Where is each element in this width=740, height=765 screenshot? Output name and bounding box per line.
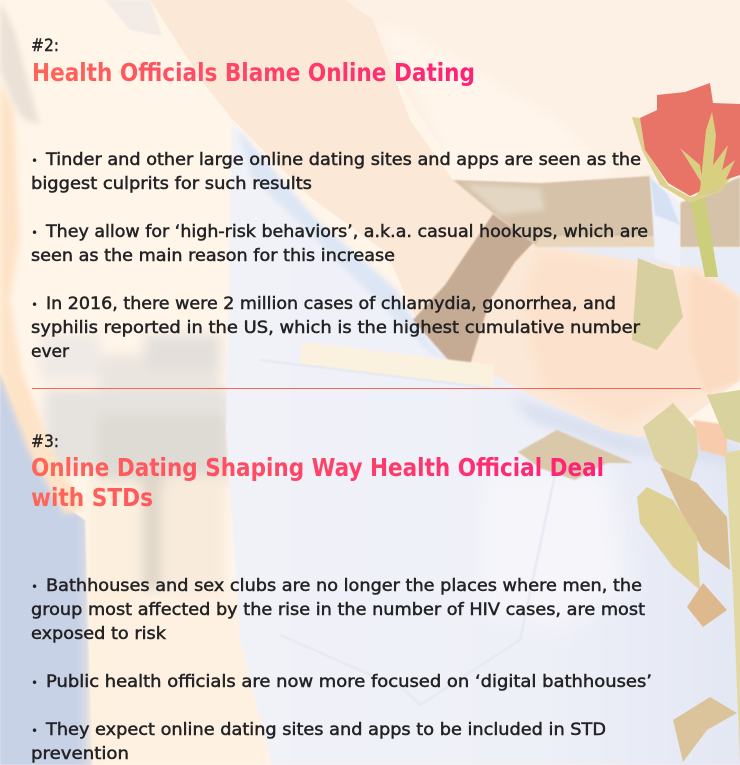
section 2 bullet points xyxy=(31,150,648,362)
section 3 bullet points: They expect online dating sites and apps to be included in STD xyxy=(45,720,606,740)
jeans blue shadow along arm xyxy=(238,130,450,368)
stem xyxy=(690,197,718,277)
section 3 bullet points: exposed to risk xyxy=(31,624,166,644)
lower leaves xyxy=(643,403,698,490)
section 3 bullet points: Bathhouses and sex clubs are no longer the places where men, the xyxy=(46,576,642,596)
section 3 heading xyxy=(31,453,604,512)
lower stem xyxy=(725,450,740,765)
section 2 bullet points: biggest culprits for such results xyxy=(31,174,312,194)
section 3 bullet points: group most affected by the rise in the number of HIV cases, are most xyxy=(31,600,645,620)
section 2 heading: Health Officials Blame Online Dating xyxy=(32,58,475,87)
section 2 bullet points: syphilis reported in the US, which is the highest cumulative number xyxy=(31,318,640,338)
section 3 heading: with STDs xyxy=(31,483,153,512)
section 3 bullet points: • xyxy=(31,724,38,738)
section 2 bullet points: • xyxy=(31,226,38,240)
left blue sky xyxy=(0,372,92,765)
left person's arm xyxy=(0,80,84,514)
blurred street backdrop xyxy=(40,335,270,765)
section 2 bullet points: • xyxy=(31,298,38,312)
section 3 heading: Online Dating Shaping Way Health Official Deal xyxy=(31,453,604,482)
section 3 bullet points: • xyxy=(31,676,38,690)
section 3 bullet points: • xyxy=(31,580,38,594)
section 3 bullet points: prevention xyxy=(31,744,129,764)
left person's hair xyxy=(0,0,40,125)
torso xyxy=(345,0,740,178)
rose sepals xyxy=(632,117,735,203)
torn belt patch xyxy=(518,430,633,480)
belt right segment xyxy=(680,177,740,247)
section 3 xyxy=(31,432,652,764)
section 2 bullet points: ever xyxy=(31,342,69,362)
section 2 number: #2: xyxy=(31,36,59,56)
section 2 bullet points: seen as the main reason for this increase xyxy=(31,246,395,266)
jeans xyxy=(226,122,740,765)
hand fingertip under leaves xyxy=(693,420,727,457)
sleeve xyxy=(105,0,162,36)
arm and hand xyxy=(150,0,740,437)
section 2 xyxy=(31,36,648,362)
back pocket band xyxy=(300,342,494,388)
section 3 bullet points: Public health officials are now more focused on ‘digital bathhouses’ xyxy=(46,672,652,692)
belt loop xyxy=(650,176,680,268)
belt left segment xyxy=(453,176,656,245)
section 3 number: #3: xyxy=(31,432,59,452)
rose bloom xyxy=(640,83,740,196)
section 2 bullet points: They allow for ‘high-risk behaviors’, a.k.a. casual hookups, which are xyxy=(45,222,648,242)
pocket seam xyxy=(260,360,556,705)
section 2 bullet points: Tinder and other large online dating sites and apps are seen as the xyxy=(45,150,641,170)
section 2 bullet points: In 2016, there were 2 million cases of chlamydia, gonorrhea, and xyxy=(46,294,616,314)
leaf near hand xyxy=(632,258,683,350)
section 2 bullet points: • xyxy=(31,154,38,168)
watch strap xyxy=(413,214,533,365)
section 3 bullet points xyxy=(31,576,652,764)
